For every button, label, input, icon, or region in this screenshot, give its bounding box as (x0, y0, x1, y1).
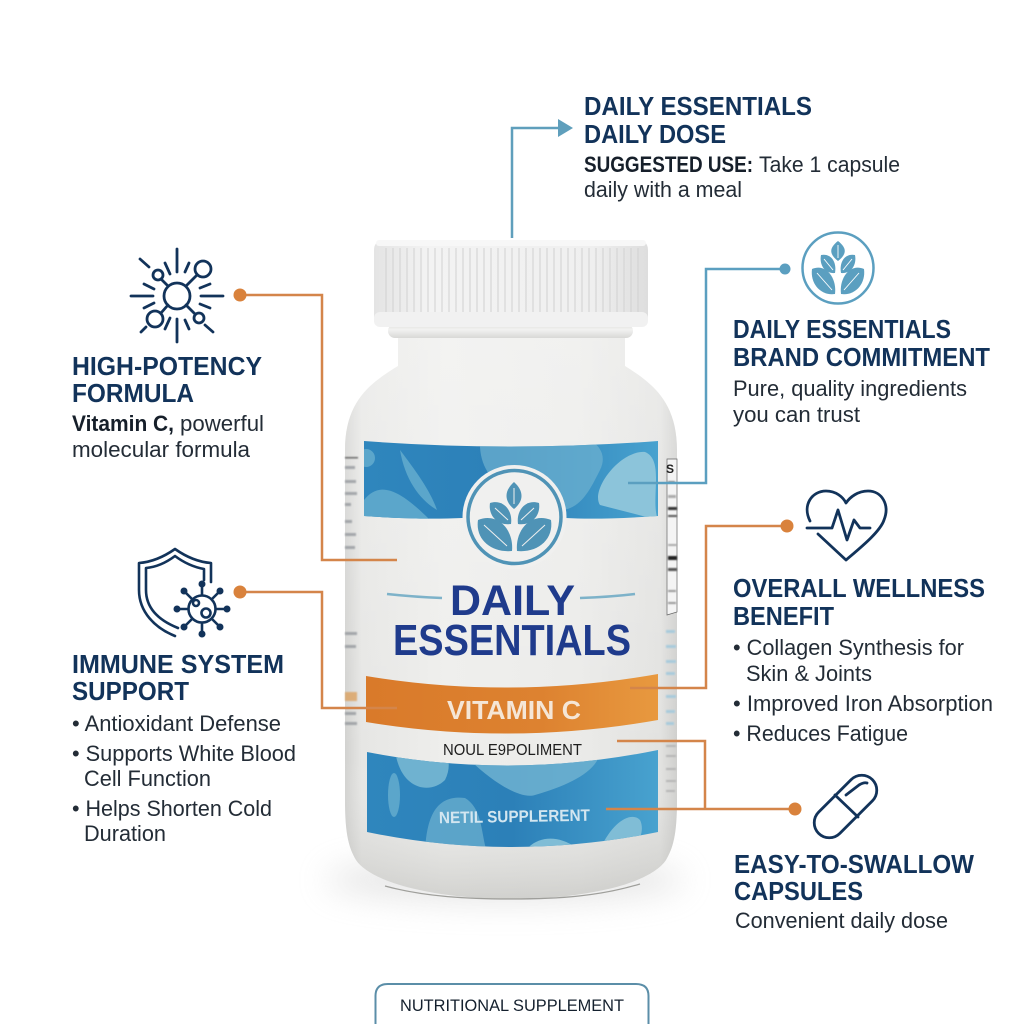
icon: shield with virus (139, 549, 230, 638)
callout: daily dose (584, 91, 900, 202)
top blue label band (357, 440, 658, 522)
callout: daily dose: DAILY ESSENTIALS (584, 91, 812, 121)
footer tag: nutritional supplement (376, 984, 648, 1024)
connector: high-potency formula (234, 288, 397, 560)
callout: immune system support: IMMUNE SYSTEM (72, 649, 284, 679)
callout: immune system support: • Antioxidant Defense (72, 711, 281, 736)
bottle shadow (325, 858, 685, 902)
callout: overall wellness benefit: • Reduces Fatigue (733, 721, 908, 746)
connector: capsules (606, 741, 802, 816)
callout: easy-to-swallow capsules: EASY-TO-SWALLOW (734, 849, 974, 879)
label subtitle: NOUL E9POLIMENT (443, 742, 582, 759)
connector: daily dose arrow (512, 119, 573, 238)
bottle body (345, 335, 677, 899)
callout: immune system support: • Supports White Blood (72, 741, 296, 766)
icon: heart with pulse (807, 491, 886, 560)
icon: brand leaf (802, 232, 874, 304)
callout: immune system support: • Helps Shorten Cold (72, 796, 272, 821)
callout: overall wellness benefit (733, 573, 993, 746)
brand name: DAILY (450, 577, 575, 625)
callout: overall wellness benefit: BENEFIT (733, 601, 834, 631)
right side supplement facts panel (666, 459, 677, 792)
callout: daily dose: SUGGESTED USE: (584, 152, 753, 177)
callout: daily dose: DAILY DOSE (584, 119, 726, 149)
right side supplement facts panel: S (666, 462, 674, 476)
callout: high-potency formula: molecular formula (72, 437, 251, 462)
callout: daily dose: daily with a meal (584, 177, 742, 202)
callout: overall wellness benefit: • Collagen Synthesis for (733, 635, 964, 660)
brand name: ESSENTIALS (393, 616, 631, 665)
callout: immune system support (72, 649, 296, 846)
callout: brand commitment: you can trust (733, 402, 860, 427)
callout: high-potency formula: powerful (180, 411, 264, 436)
callout: overall wellness benefit: OVERALL WELLNESS (733, 573, 985, 603)
callout: immune system support: Cell Function (84, 766, 211, 791)
callout: easy-to-swallow capsules: Convenient daily dose (735, 908, 948, 933)
label logo (462, 465, 566, 569)
callout: easy-to-swallow capsules: CAPSULES (734, 876, 863, 906)
callout: brand commitment: DAILY ESSENTIALS (733, 314, 951, 344)
callout: immune system support: SUPPORT (72, 676, 189, 706)
bottom blue label band (367, 750, 658, 847)
orange vitamin band: VITAMIN C (447, 695, 581, 725)
callout: brand commitment: Pure, quality ingredients (733, 376, 967, 401)
brand name (387, 577, 635, 665)
callout: high-potency formula: Vitamin C, (72, 411, 174, 436)
callout: brand commitment: BRAND COMMITMENT (733, 342, 990, 372)
bottle cap (374, 240, 648, 327)
orange vitamin band (366, 674, 658, 734)
left side label fine print (345, 457, 358, 725)
callout: immune system support: Duration (84, 821, 166, 846)
product bottle (325, 240, 685, 902)
callout: high-potency formula: HIGH-POTENCY (72, 351, 262, 381)
callout: easy-to-swallow capsules (734, 849, 974, 933)
neck ring (388, 324, 633, 338)
connector: immune system (234, 586, 397, 708)
connector: overall wellness (630, 520, 794, 688)
callout: daily dose: Take 1 capsule (759, 152, 900, 177)
callout: overall wellness benefit: • Improved Iron Absorption (733, 691, 993, 716)
callout: high-potency formula (72, 351, 264, 462)
connector: brand commitment (628, 264, 790, 483)
footer tag: nutritional supplement: NUTRITIONAL SUPPLEMENT (400, 996, 624, 1015)
bottom blue label band: NETIL SUPPLERENT (439, 807, 590, 827)
icon: molecule (131, 249, 223, 342)
icon: capsule (808, 769, 883, 844)
callout: high-potency formula: FORMULA (72, 378, 194, 408)
callout: overall wellness benefit: Skin & Joints (746, 661, 872, 686)
callout: brand commitment (733, 314, 990, 427)
